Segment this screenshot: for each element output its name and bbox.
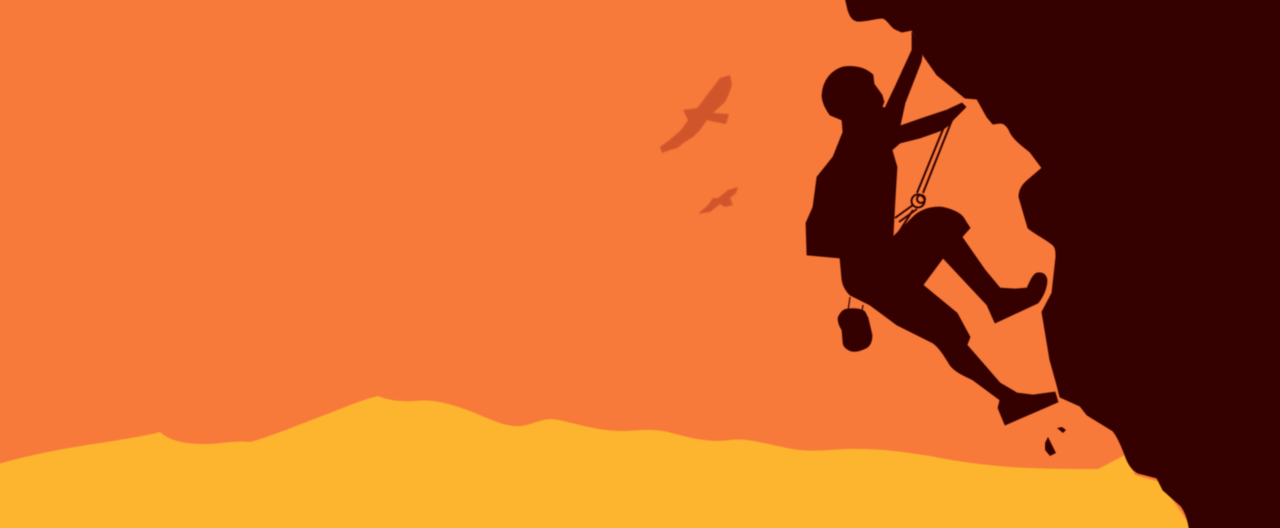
desert hills bbox=[0, 396, 1195, 528]
climber body bbox=[806, 32, 1058, 425]
climbing rope bbox=[895, 120, 952, 235]
cliff face bbox=[845, 0, 1280, 528]
small eagle bbox=[698, 187, 738, 214]
chalk bag bbox=[838, 309, 872, 351]
falling rock fragments bbox=[1045, 427, 1066, 456]
chalk bag strings bbox=[848, 297, 863, 311]
climber silhouette bbox=[806, 32, 1058, 425]
large eagle bbox=[660, 75, 732, 153]
